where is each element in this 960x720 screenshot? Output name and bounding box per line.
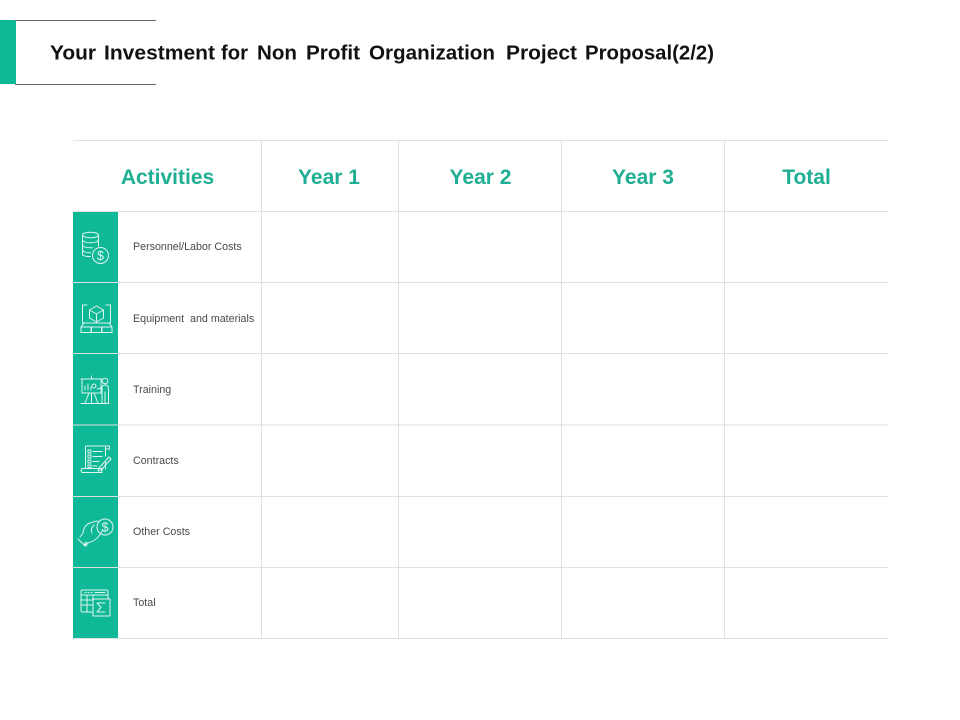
title: Profit: [306, 42, 360, 64]
title: [50, 42, 714, 64]
header accent bar: [0, 20, 16, 84]
icon: coin stack with dollar: [82, 232, 108, 264]
icon: spreadsheet with sigma: [81, 590, 110, 616]
title: for: [221, 42, 248, 64]
row label: Training: Training: [133, 384, 171, 396]
title: Investment: [104, 42, 215, 64]
icon: contract with pen: [81, 446, 111, 472]
header top rule: [15, 20, 156, 22]
row label: Total: Total: [133, 597, 156, 609]
column heading: Year 2: Year 2: [450, 166, 511, 189]
title: Your: [50, 42, 96, 64]
icon: trainer at presentation board: [81, 376, 109, 404]
column heading: Year 1: Year 1: [298, 166, 360, 189]
row label: Equipment and materials: Equipment and materials: [133, 313, 254, 325]
header bottom rule: [15, 84, 156, 86]
table: [73, 140, 888, 638]
icon: hand holding dollar coin: $: [102, 520, 109, 534]
column heading: Activities: Activities: [121, 166, 214, 189]
table grid: [73, 140, 888, 638]
icon: equipment cube on pallet: [81, 305, 112, 332]
icon: coin stack with dollar: $: [97, 249, 104, 263]
row label: Contracts: Contracts: [133, 455, 179, 467]
title: Non: [257, 42, 297, 64]
row label: Personnel/Labor Costs: Personnel/Labor Costs: [133, 241, 242, 253]
title: Organization: [369, 42, 495, 64]
activities column fill: [73, 211, 118, 638]
title: Proposal(2/2): [585, 42, 714, 64]
icon: hand holding dollar coin: [78, 519, 113, 546]
title: Project: [506, 42, 577, 64]
column heading: Year 3: Year 3: [612, 166, 674, 189]
column heading: Total: Total: [782, 166, 831, 189]
row label: Other Costs: Other Costs: [133, 526, 190, 538]
